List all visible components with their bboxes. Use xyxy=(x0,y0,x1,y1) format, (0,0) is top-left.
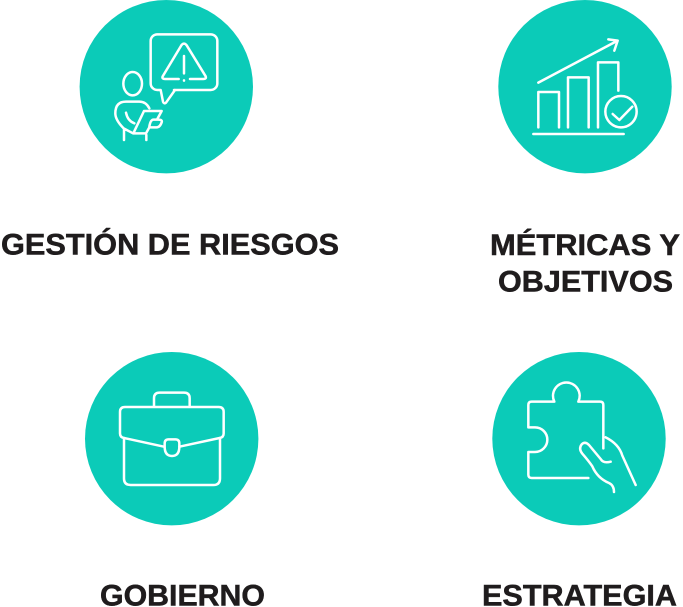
panel: gestión de riesgos xyxy=(1,0,339,262)
heading: métricas y objetivos: MÉTRICAS Y xyxy=(490,228,680,262)
icon: person with warning speech bubble xyxy=(115,34,217,140)
panel: gobierno xyxy=(85,352,265,607)
panel: métricas y objetivos xyxy=(490,0,680,299)
circle: métricas y objetivos xyxy=(498,0,672,173)
icon: hand holding puzzle piece xyxy=(528,383,636,492)
heading: métricas y objetivos xyxy=(490,228,680,299)
heading: gestión de riesgos: GESTIÓN DE RIESGOS xyxy=(1,228,339,262)
icon: rising bar chart with check xyxy=(533,39,637,134)
circle: gestión de riesgos xyxy=(80,0,253,173)
icon: briefcase xyxy=(120,393,224,485)
circle: gobierno xyxy=(85,352,258,525)
circle: estrategia xyxy=(492,352,666,525)
heading: métricas y objetivos: OBJETIVOS xyxy=(498,266,673,299)
panel: estrategia xyxy=(482,352,677,607)
